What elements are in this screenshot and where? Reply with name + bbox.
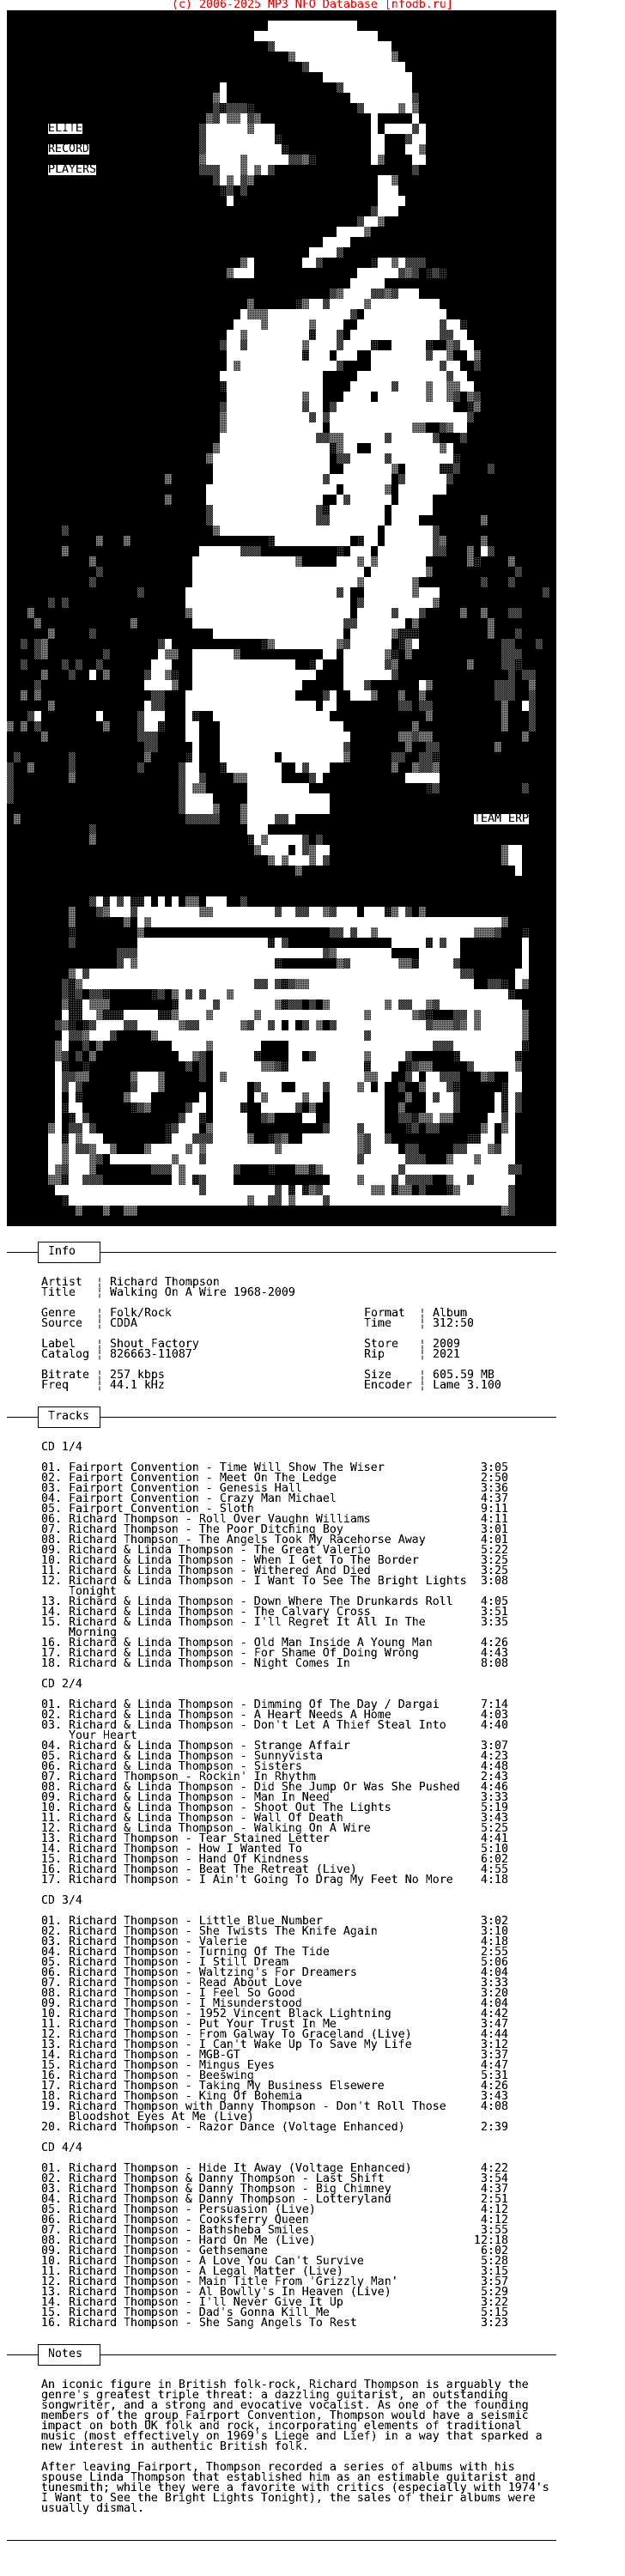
track list: CD 2/4: CD 2/4 01. Richard & Linda Thompson - Dimming Of The Day / Dargai 02. Richard & Linda Thompson - A Heart Needs A Home 03. Richard & Linda Thompson - Don't Let A Thief Steal Into Your Heart 04. Richard & Linda Thompson - Strange Affair 05. Richard & Linda Thompson - Sunnyvista 06. Richard & Linda Thompson - Sisters 07. Richard Thompson - Rockin' In Rhythm 08. Richard & Linda Thompson - Did She Jump Or Was She Pushed 09. Richard & Linda Thompson - Man In Need 10. Richard & Linda Thompson - Shoot Out The Lights 11. Richard & Linda Thompson - Wall Of Death 12. Richard & Linda Thompson - Walking On A Wire 13. Richard Thompson - Tear Stained Letter 14. Richard Thompson - How I Wanted To 15. Richard Thompson - Hand Of Kindness 16. Richard Thompson - Beat The Retreat (Live) 17. Richard Thompson - I Ain't Going To Drag My Feet No More xyxy=(41,1678,460,1886)
track durations: CD 1/4: 3:05 2:50 3:36 4:37 9:11 4:11 3:01 4:01 5:22 3:25 3:25 3:08 4:05 3:51 3:35 4:26 4:43 8:08 xyxy=(481,1461,508,1670)
track list: CD 3/4: CD 3/4 01. Richard Thompson - Little Blue Number 02. Richard Thompson - She Twists The Knife Again 03. Richard Thompson - Valerie 04. Richard Thompson - Turning Of The Tide 05. Richard Thompson - I Still Dream 06. Richard Thompson - Waltzing's For Dreamers 07. Richard Thompson - Read About Love 08. Richard Thompson - I Feel So Good 09. Richard Thompson - I Misunderstood 10. Richard Thompson - 1952 Vincent Black Lightning 11. Richard Thompson - Put Your Trust In Me 12. Richard Thompson - From Galway To Graceland (Live) 13. Richard Thompson - I Can't Wake Up To Save My Life 14. Richard Thompson - MGB-GT 15. Richard Thompson - Mingus Eyes 16. Richard Thompson - Beeswing 17. Richard Thompson - Taking My Business Elsewere 18. Richard Thompson - King Of Bohemia 19. Richard Thompson with Danny Thompson - Don't Roll Those Bloodshot Eyes At Me (Live) 20. Richard Thompson - Razor Dance (Voltage Enhanced) xyxy=(41,1894,446,2134)
artwork: astronaut figure and boombox in block characters xyxy=(7,21,549,1216)
artwork: astronaut figure xyxy=(7,26,549,871)
section divider: Tracks: Tracks xyxy=(48,1410,89,1423)
section divider: Info: Info xyxy=(48,1245,76,1258)
panel: release info, left column: Artist ¦ Richard Thompson Title ¦ Walking On A Wire 1968-2009 Genre ¦ Folk/Rock Source ¦ CDDA Label ¦ Shout Factory Catalog ¦ 826663-11087 Bitrate ¦ 257 kbps Freq ¦ 44.1 kHz xyxy=(41,1276,295,1392)
track durations: CD 2/4: 7:14 4:03 4:40 3:07 4:23 4:48 2:43 4:46 3:33 5:19 3:43 5:25 4:41 5:10 6:02 4:55 4:18 xyxy=(481,1698,508,1886)
artwork: boombox xyxy=(48,902,529,1211)
section divider: Notes: Notes xyxy=(48,2348,82,2360)
track durations: CD 3/4: 3:02 3:10 4:18 2:55 5:06 4:04 3:33 3:20 4:04 4:42 3:47 4:44 3:12 3:37 4:47 5:31 4:26 3:43 4:08 2:39 xyxy=(481,1915,508,2134)
track list: CD 1/4: CD 1/4 01. Fairport Convention - Time Will Show The Wiser 02. Fairport Convention - Meet On The Ledge 03. Fairport Convention - Genesis Hall 04. Fairport Convention - Crazy Man Michael 05. Fairport Convention - Sloth 06. Richard Thompson - Roll Over Vaughn Williams 07. Richard Thompson - The Poor Ditching Boy 08. Richard Thompson - The Angels Took My Racehorse Away 09. Richard & Linda Thompson - The Great Valerio 10. Richard & Linda Thompson - When I Get To The Border 11. Richard & Linda Thompson - Withered And Died 12. Richard & Linda Thompson - I Want To See The Bright Lights Tonight 13. Richard & Linda Thompson - Down Where The Drunkards Roll 14. Richard & Linda Thompson - The Calvary Cross 15. Richard & Linda Thompson - I'll Regret It All In The Morning 16. Richard & Linda Thompson - Old Man Inside A Young Man 17. Richard & Linda Thompson - For Shame Of Doing Wrong 18. Richard & Linda Thompson - Night Comes In xyxy=(41,1441,467,1670)
text block: notes: An iconic figure in British folk-rock, Richard Thompson is arguably the genre's greatest triple threat: a dazzling guitarist, an outstanding songwriter, and a strong and evocative vocalist. As one of the founding members of the group Fairport Convention, Thompson would have a seismic impact on both UK folk and rock, incorporating elements of traditional music (most effectively on 1969's Liege and Lief) in a way that sparked a new interest in authentic British folk. After leaving Fairport, Thompson recorded a series of albums with his spouse Linda Thompson that established him as an estimable guitarist and tunesmith; while they were a favorite with critics (especially with 1974's I Want to See the Bright Lights Tonight), the sales of their albums were usually dismal. xyxy=(41,2379,549,2515)
panel: release info, right column: Format ¦ Album Time ¦ 312:50 Store ¦ 2009 Rip ¦ 2021 Size ¦ 605.59 MB Encoder ¦ Lame 3.100 xyxy=(364,1307,501,1392)
track list: CD 4/4: CD 4/4 01. Richard Thompson - Hide It Away (Voltage Enhanced) 02. Richard Thompson & Danny Thompson - Last Shift 03. Richard Thompson & Danny Thompson - Big Chimney 04. Richard Thompson & Danny Thompson - Lotteryland 05. Richard Thompson - Persuasion (Live) 06. Richard Thompson - Cooksferry Queen 07. Richard Thompson - Bathsheba Smiles 08. Richard Thompson - Hard On Me (Live) 09. Richard Thompson - Gethsemane 10. Richard Thompson - A Love You Can't Survive 11. Richard Thompson - A Legal Matter (Live) 12. Richard Thompson - Main Title From 'Grizzly Man' 13. Richard Thompson - Al Bowlly's In Heaven (Live) 14. Richard Thompson - I'll Never Give It Up 15. Richard Thompson - Dad's Gonna Kill Me 16. Richard Thompson - She Sang Angels To Rest xyxy=(41,2142,412,2330)
panel: ANSI artwork xyxy=(7,10,556,1226)
track durations: CD 4/4: 4:22 3:54 4:37 2:51 4:12 4:12 3:55 12:18 6:02 5:28 3:15 3:57 5:29 3:22 5:15 3:23 xyxy=(474,2162,508,2330)
